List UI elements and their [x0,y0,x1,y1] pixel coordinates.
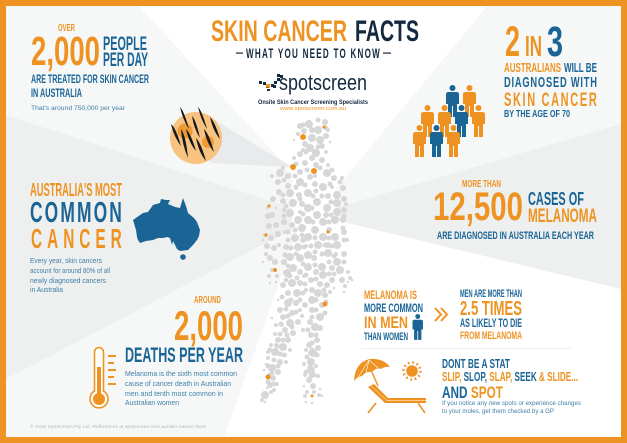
copyright: © 2015 Spotscreen Pty Ltd. References at spotscreen.com.au/skin-cancer-facts [30,423,207,429]
stat: 2 in 3: BY THE AGE OF 70 [504,109,570,120]
stat: 2 in 3: DIAGNOSED WITH [504,74,597,91]
text: don't be a stat: to your moles, get them checked by a GP [442,409,554,415]
stat: deaths per year: AROUND [194,295,221,306]
stat: 12,500 melanoma cases: MORE THAN [462,179,501,190]
stat: 12,500 melanoma cases: CASES OF [528,189,584,209]
stat: 12,500 melanoma cases: 12,500 [433,185,523,229]
stat: most common cancer: newly diagnosed cancers [30,276,106,285]
logo: spotscreen: spotscreen [279,70,367,95]
stat: 2.5 times: AS LIKELY TO DIE [460,316,522,330]
stat: most common cancer: AUSTRALIA'S MOST [30,180,122,200]
stat: 2000 people per day [31,23,149,112]
text: don't be a stat: SLIP, SLOP, SLAP, SEEK & SLIDE... [442,370,578,384]
stat: 2000 people per day: IN AUSTRALIA [31,88,82,100]
stat: 2000 people per day: OVER [58,23,75,34]
logo: spotscreen: Onsite Skin Cancer Screening Specialists [258,99,368,106]
stat: deaths per year: DEATHS PER YEAR [125,344,243,367]
text: don't be a stat: AND SPOT [442,383,503,402]
stat: 2.5 times: FROM MELANOMA [460,330,522,342]
stat: deaths per year: men and tenth most common in [125,389,223,398]
stat: melanoma more common in men: MELANOMA IS [364,288,417,302]
icon: thermometer [90,348,116,408]
logo: spotscreen: www.spotscreen.com.au [279,106,346,112]
stat: 2.5 times: 2.5 TIMES [460,298,522,320]
logo: spotscreen [258,70,368,112]
stat: melanoma more common in men: IN MEN [364,313,408,332]
stat: 2 in 3 [504,18,597,120]
stat: 2000 people per day: 2,000 [31,28,100,74]
title: WHAT YOU NEED TO KNOW [246,47,380,62]
icon: magnified skin with hairs and moles [170,107,222,164]
stat: melanoma more common in men: THAN WOMEN [364,331,408,343]
text: don't be a stat: If you notice any new spots or experience changes [442,401,581,407]
stat: most common cancer: in Australia [30,285,64,294]
icon: group of people [413,85,485,157]
stat: 2000 people per day: That's around 750,000 per year [31,105,126,112]
stat: most common cancer: CANCER [31,223,122,254]
stat: melanoma more common in men [364,288,423,343]
stat: deaths per year: Melanoma is the sixth most common [125,369,237,378]
icon: sun [404,362,420,380]
title: SKIN CANCER [211,15,347,48]
stat: 2.5 times: MEN ARE MORE THAN [460,288,522,300]
icon: double chevron arrow [435,308,447,321]
stat: 2000 people per day: PEOPLE [103,34,147,55]
stat: 2 in 3: IN [525,31,542,63]
stat: 12,500 melanoma cases [433,179,597,242]
title: FACTS [355,15,419,48]
text: don't be a stat: DONT BE A STAT [442,357,510,371]
stat: 2.5 times [460,288,522,342]
stat: 2 in 3: 2 [505,18,520,66]
stat: 2 in 3: SKIN CANCER [504,90,597,111]
stat: deaths per year: 2,000 [174,302,243,349]
stat: most common cancer: account for around 80% of all [30,266,110,275]
stat: 2000 people per day: PER DAY [103,50,148,71]
stat: deaths per year: cause of cancer death in Australian [125,379,231,388]
stat: 2 in 3: WILL BE [564,61,597,75]
stat: 2000 people per day: ARE TREATED FOR SKIN CANCER [31,74,149,86]
text: don't be a stat [442,357,581,415]
icon: map of Australia [133,198,200,260]
stat: most common cancer: Every year, skin cancers [30,256,102,265]
icon: beach umbrella and lounger [354,359,426,413]
stat: deaths per year [125,295,243,407]
icon: man [412,314,423,340]
stat: 2 in 3: AUSTRALIANS [504,61,561,75]
human body made of dots [262,120,352,403]
stat: deaths per year: Australian women [125,398,179,407]
stat: most common cancer [30,180,122,294]
stat: melanoma more common in men: MORE COMMON [364,301,423,315]
stat: 2 in 3: 3 [547,18,563,66]
stat: most common cancer: COMMON [30,197,122,229]
